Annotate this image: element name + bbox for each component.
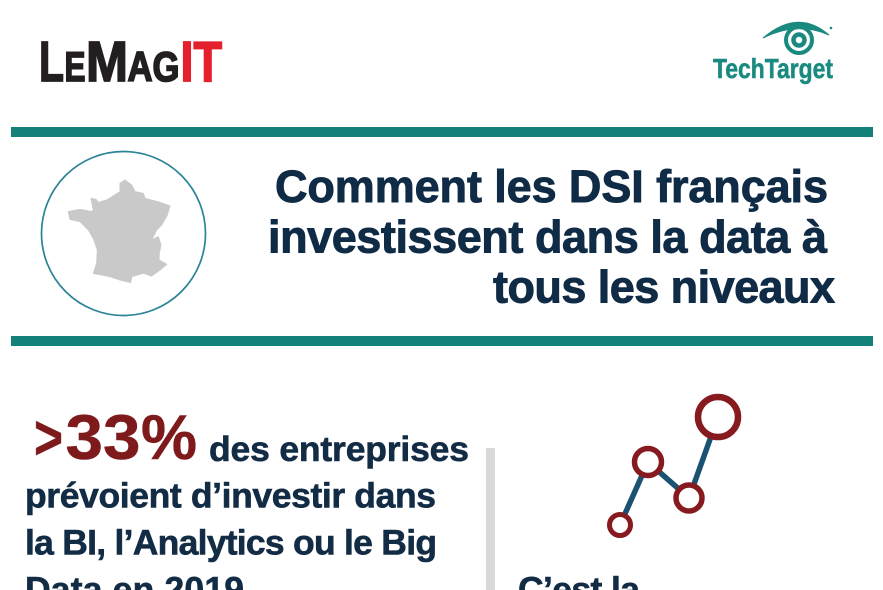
logo: LeMagIT: M [86, 30, 128, 94]
big number: > [34, 403, 63, 473]
icon: map of France in a circle [42, 152, 206, 316]
logo: LeMagIT: IT [180, 30, 222, 94]
top teal rule [11, 127, 873, 137]
text block: 33% statistic: la BI, l’Analytics ou le Big [25, 522, 437, 562]
title: Comment les DSI français [275, 161, 828, 212]
bottom teal rule [11, 336, 873, 346]
icon: TechTarget eye [763, 22, 832, 53]
logo: LeMagIT: E [64, 43, 86, 90]
big number: % [141, 403, 197, 473]
logo: TechTarget [713, 22, 833, 84]
text block: 33% statistic [25, 403, 469, 590]
wordmark: TechTarget: TechTarget [713, 53, 833, 84]
icon: line chart [610, 397, 738, 536]
big number [34, 403, 197, 473]
title: tous les niveaux [493, 262, 835, 312]
text block: 33% statistic: des entreprises [209, 429, 469, 469]
France silhouette [68, 180, 170, 283]
text block: 33% statistic: prévoient d’investir dans [25, 476, 436, 516]
title [268, 161, 835, 312]
big number: 33 [66, 403, 140, 473]
logo: LeMagIT: AG [128, 43, 180, 90]
title: investissent dans la data à [268, 212, 828, 262]
logo: LeMagIT [39, 30, 222, 94]
vertical divider [486, 448, 495, 590]
logo: LeMagIT: L [39, 30, 64, 94]
